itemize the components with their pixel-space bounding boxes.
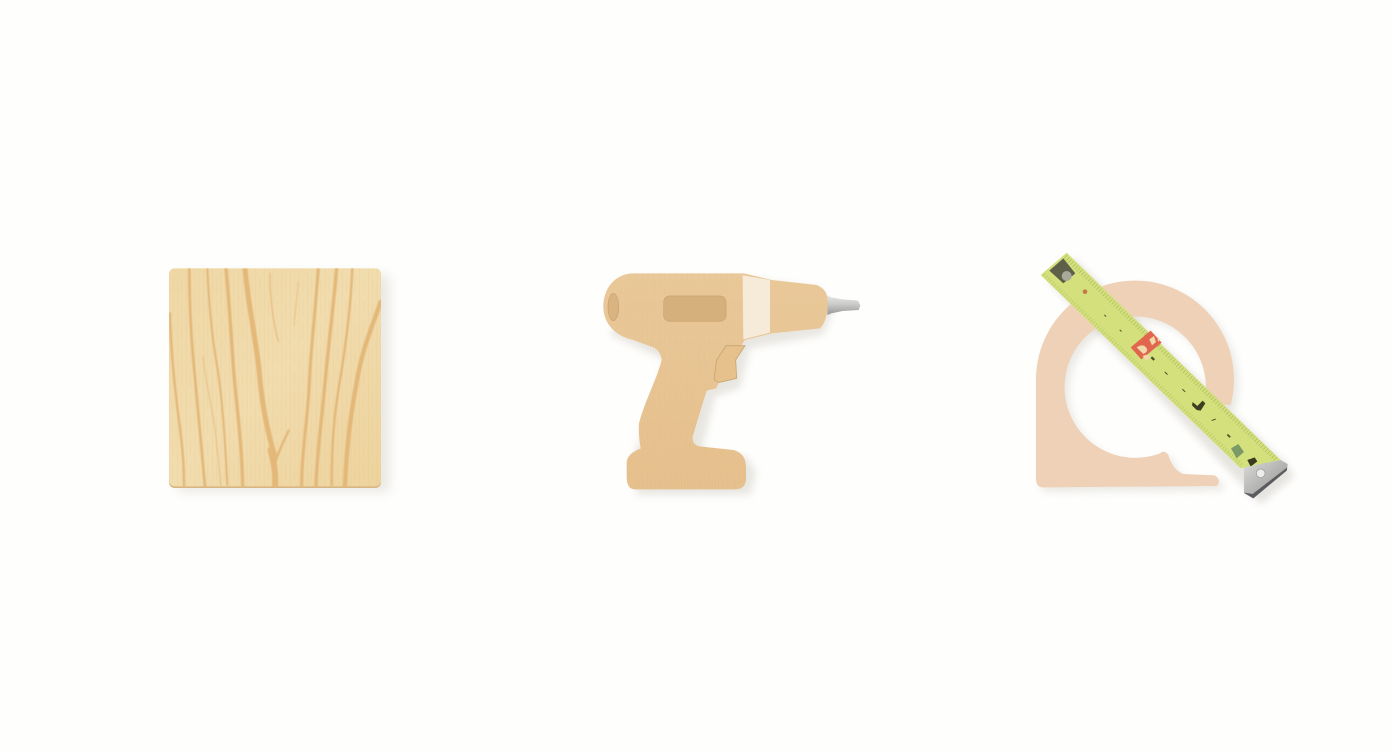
icon: measuring tape bbox=[1036, 253, 1294, 504]
drill trigger bbox=[714, 346, 745, 383]
drill bit bbox=[827, 296, 860, 315]
drill side window bbox=[664, 296, 726, 321]
drill collar bbox=[743, 275, 770, 339]
drill rear slot bbox=[608, 293, 619, 321]
icon: wood board bbox=[169, 268, 390, 492]
red brand label bbox=[1131, 331, 1162, 359]
measurement marks bbox=[1083, 289, 1257, 467]
tape blade bbox=[1041, 253, 1281, 468]
tape end hook bbox=[1244, 460, 1288, 498]
icon: wooden drill bbox=[603, 273, 860, 495]
drill body bbox=[603, 273, 828, 489]
tape case bbox=[1036, 281, 1234, 487]
blade end rivet tab bbox=[1049, 258, 1075, 283]
